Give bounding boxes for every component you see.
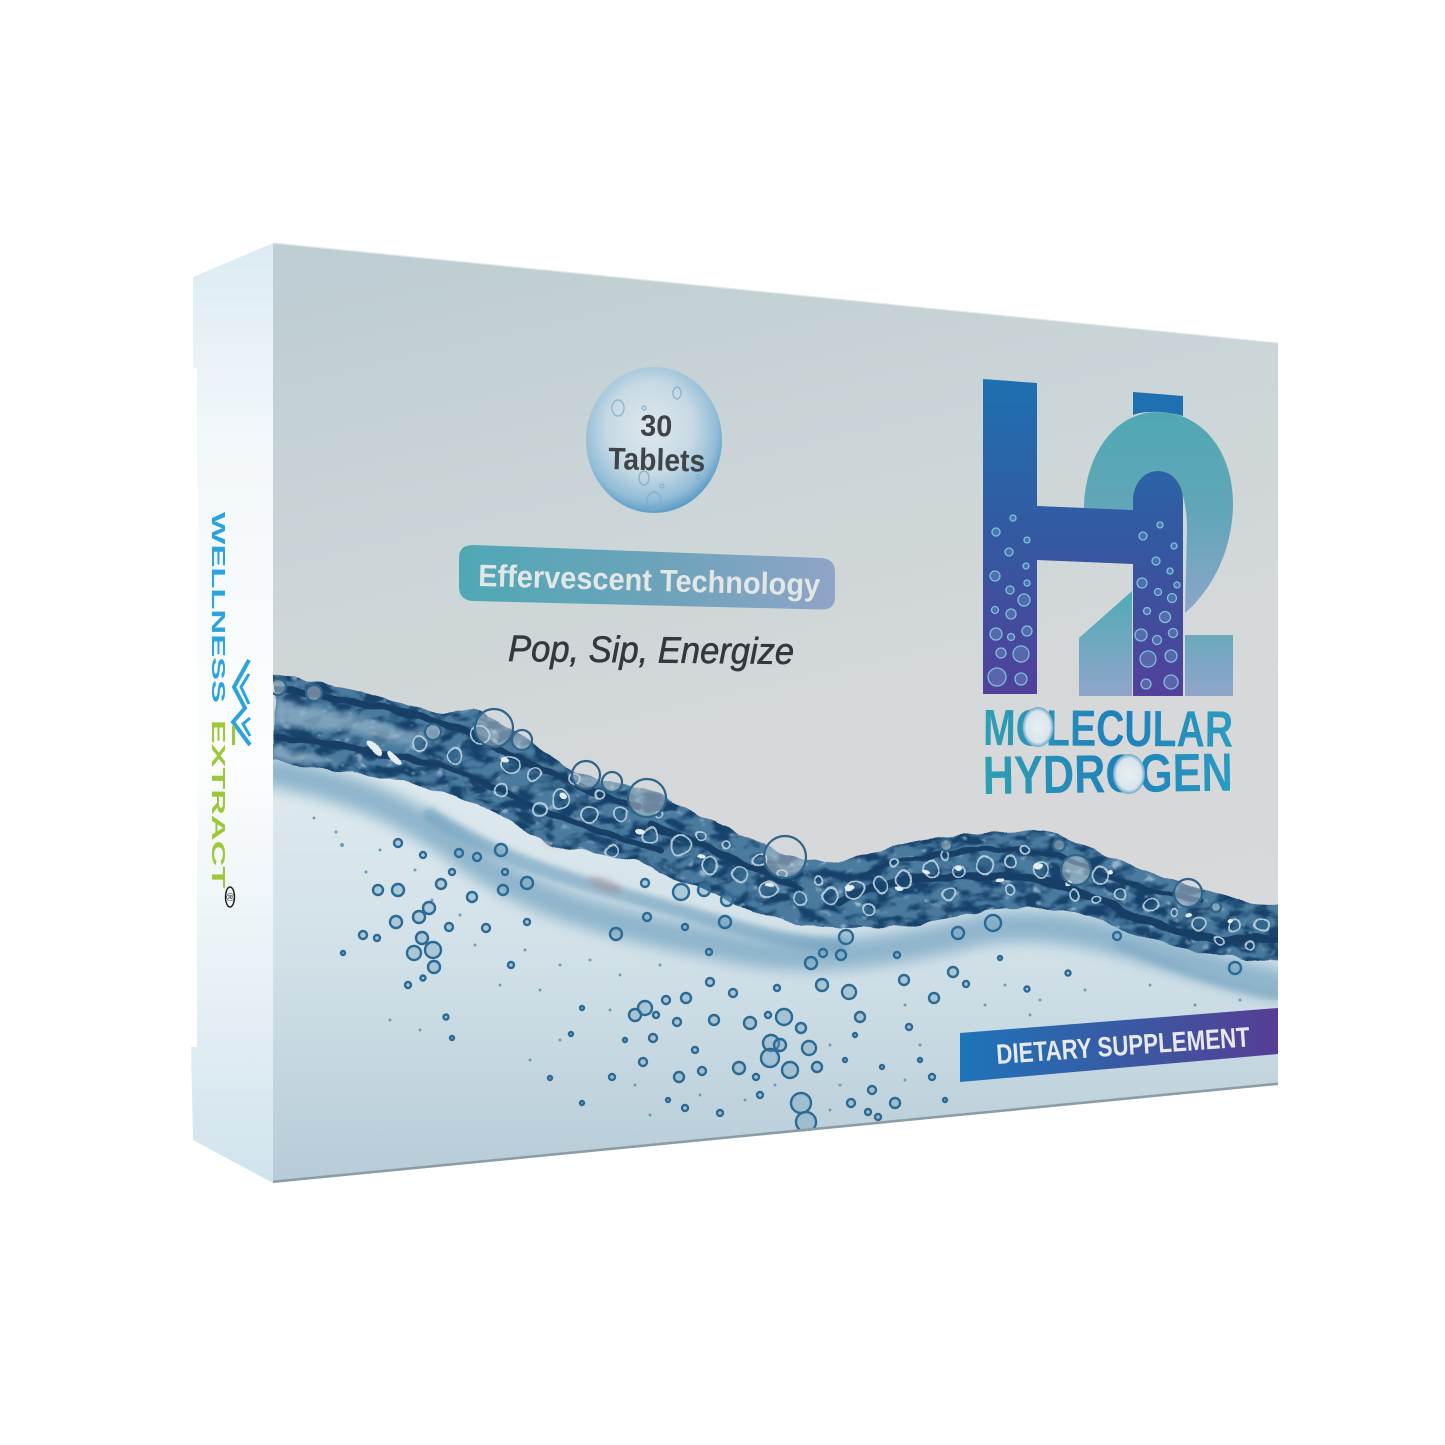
dietary supplement banner xyxy=(960,1008,1278,1082)
icon: WE logo xyxy=(233,660,250,745)
large surface bubbles xyxy=(270,679,1221,912)
bottom edge xyxy=(273,1084,1278,1182)
technology pill: Effervescent Technology xyxy=(478,558,821,603)
tagline: Pop, Sip, Energize xyxy=(508,628,794,672)
spine brand name xyxy=(208,512,236,907)
fine mist of tiny bubbles xyxy=(312,816,1242,1116)
rust reflections xyxy=(544,842,622,894)
dietary supplement banner: DIETARY SUPPLEMENT xyxy=(995,1021,1251,1070)
wordmark: MOLECULAR xyxy=(983,699,1233,758)
wordmark: HYDROGEN xyxy=(982,743,1233,806)
spine brand name: EXTRACT xyxy=(208,720,228,888)
water below surface xyxy=(273,740,1278,1200)
H2 logo xyxy=(982,379,1233,806)
undercurrent swathes xyxy=(273,772,1278,995)
letter H xyxy=(983,379,1183,696)
badge count: 30 xyxy=(640,410,673,443)
badge label: Tablets xyxy=(608,441,706,479)
wordmark xyxy=(985,707,1232,794)
bubble badge xyxy=(586,367,722,513)
box spine xyxy=(191,243,273,1183)
numeral 2 xyxy=(1079,412,1233,696)
water illustration xyxy=(270,660,1278,1200)
technology pill xyxy=(459,545,835,610)
spine brand name: ® xyxy=(224,893,236,901)
wave band xyxy=(273,660,1278,970)
spine brand name: WELLNESS xyxy=(208,512,228,703)
H bubbles xyxy=(988,515,1180,689)
rising bubbles xyxy=(341,839,1241,1132)
box front panel xyxy=(270,243,1278,1200)
product box xyxy=(191,243,1278,1200)
